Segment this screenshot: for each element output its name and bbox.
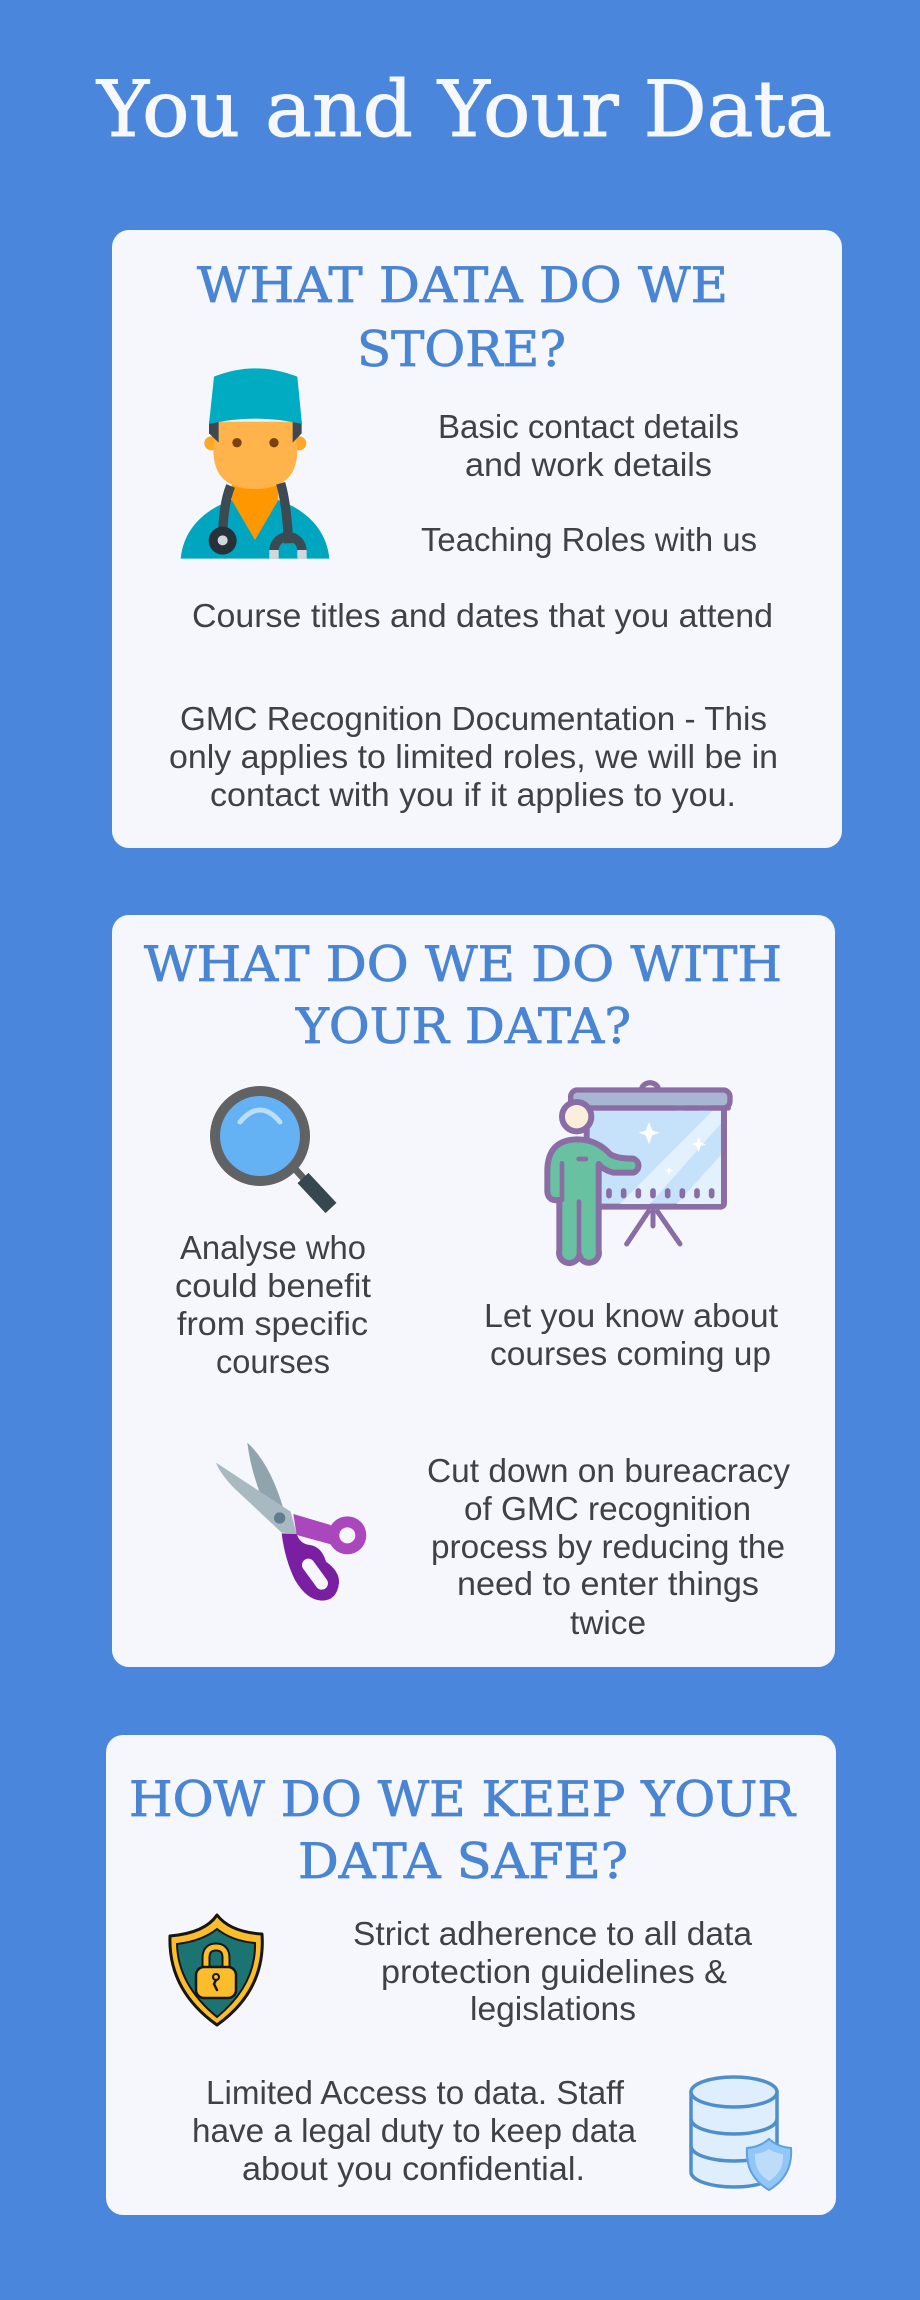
text: bureaucracy: Cut down on bureacracy	[427, 1452, 791, 1489]
text: courses coming up: courses coming up	[490, 1335, 771, 1372]
text: courses coming up	[484, 1297, 778, 1372]
text: bureaucracy: process by reducing the	[431, 1528, 785, 1565]
text: bureaucracy: need to enter things	[457, 1565, 759, 1602]
text: contact details	[438, 408, 739, 483]
text: strict adherence: Strict adherence to all data	[353, 1915, 753, 1952]
text: contact details: and work details	[465, 446, 712, 483]
text: GMC documentation	[169, 700, 778, 813]
heading: what data do we store: STORE?	[357, 321, 566, 378]
text: GMC documentation: contact with you if it applies to you.	[210, 776, 736, 813]
panel: what data do we store	[112, 230, 842, 848]
text: analyse: Analyse who	[180, 1229, 366, 1266]
text: bureaucracy: twice	[570, 1604, 646, 1641]
heading: what data do we store	[197, 257, 728, 378]
heading: what do we do with your data	[144, 936, 782, 1055]
heading: what do we do with your data: WHAT DO WE DO WITH	[144, 936, 782, 993]
text: analyse: from specific	[177, 1305, 368, 1342]
heading: how do we keep your data safe: DATA SAFE?	[298, 1833, 628, 1890]
title: You and Your Data	[96, 65, 832, 155]
text: teaching roles: Teaching Roles with us	[421, 521, 757, 558]
heading: what do we do with your data: YOUR DATA?	[295, 998, 631, 1055]
text: courses coming up: Let you know about	[484, 1297, 778, 1334]
text: strict adherence: legislations	[470, 1990, 636, 2027]
panel: what do we do with your data	[112, 915, 835, 1667]
icon: database with shield	[691, 2077, 791, 2190]
text: limited access: Limited Access to data. Staff	[206, 2074, 625, 2111]
text: strict adherence: protection guidelines &	[381, 1953, 727, 1990]
icon: presenter at screen	[547, 1083, 730, 1263]
text: limited access	[192, 2074, 637, 2187]
heading: how do we keep your data safe: HOW DO WE KEEP YOUR	[129, 1771, 797, 1828]
heading: how do we keep your data safe	[129, 1771, 797, 1890]
text: analyse: could benefit	[175, 1267, 371, 1304]
text: GMC documentation: GMC Recognition Documentation - This	[180, 700, 767, 737]
text: contact details: Basic contact details	[438, 408, 739, 445]
text: GMC documentation: only applies to limited roles, we will be in	[169, 738, 778, 775]
text: analyse	[175, 1229, 371, 1380]
text: bureaucracy	[427, 1452, 791, 1641]
text: analyse: courses	[216, 1343, 330, 1380]
text: bureaucracy: of GMC recognition	[464, 1490, 751, 1527]
heading: what data do we store: WHAT DATA DO WE	[197, 257, 728, 314]
text: course titles: Course titles and dates that you attend	[192, 597, 773, 634]
icon: shield with padlock	[170, 1915, 262, 2025]
icon: magnifying glass	[215, 1091, 331, 1208]
text: limited access: about you confidential.	[242, 2150, 585, 2187]
text: strict adherence	[353, 1915, 753, 2027]
panel: how do we keep your data safe	[106, 1735, 836, 2215]
text: limited access: have a legal duty to keep data	[192, 2112, 637, 2149]
icon: doctor	[181, 368, 329, 559]
icon: scissors	[216, 1443, 366, 1601]
